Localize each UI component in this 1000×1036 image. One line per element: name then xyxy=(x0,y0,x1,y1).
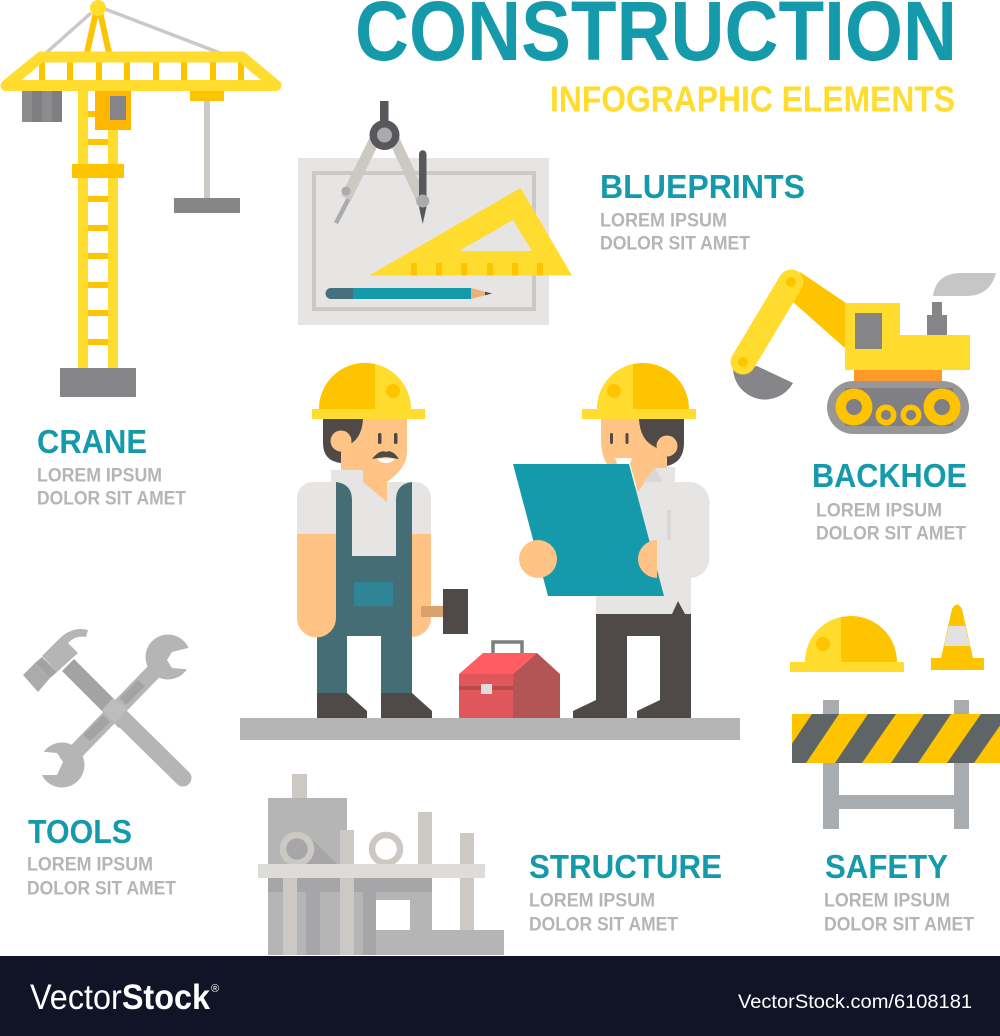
crane top frame xyxy=(87,12,109,53)
tracks xyxy=(827,381,969,434)
beam xyxy=(258,864,485,878)
safety label xyxy=(824,849,974,936)
barrier band xyxy=(779,714,1000,763)
tools label: TOOLS xyxy=(28,814,132,851)
structure shadow xyxy=(297,840,337,864)
crane hook xyxy=(174,91,240,213)
safety label: LOREM IPSUM xyxy=(824,890,950,912)
blueprints label xyxy=(600,169,805,254)
shirt body xyxy=(596,467,710,614)
backhoe label: BACKHOE xyxy=(812,458,967,495)
hammer xyxy=(23,629,183,778)
crane label: LOREM IPSUM xyxy=(37,464,162,486)
counterweight xyxy=(22,91,62,122)
exhaust xyxy=(927,302,947,335)
registered mark: ® xyxy=(211,983,219,995)
crane label: CRANE xyxy=(37,424,147,461)
crane rungs xyxy=(39,60,244,345)
structure label: DOLOR SIT AMET xyxy=(529,914,678,936)
tools label: LOREM IPSUM xyxy=(27,854,153,876)
blueprints illustration xyxy=(298,101,572,325)
footer bar xyxy=(0,956,1000,1036)
paper xyxy=(298,158,549,325)
columns xyxy=(283,812,474,955)
blueprints label: LOREM IPSUM xyxy=(600,210,727,232)
trousers xyxy=(317,610,412,693)
hook cable xyxy=(204,100,210,198)
subtitle: INFOGRAPHIC ELEMENTS xyxy=(550,78,955,120)
collar and pleat xyxy=(643,468,671,540)
face xyxy=(601,419,684,492)
shirt xyxy=(297,470,431,560)
crane illustration xyxy=(6,0,276,397)
tools icon xyxy=(23,629,196,788)
shoes xyxy=(573,700,660,718)
footer url: VectorStock.com/6108181 xyxy=(738,992,972,1013)
crane top ball xyxy=(90,0,106,16)
backhoe illustration xyxy=(733,272,996,434)
crossing xyxy=(102,698,128,723)
safety label: SAFETY xyxy=(825,849,948,886)
helmet xyxy=(582,363,696,419)
worker reading plan xyxy=(513,363,710,718)
hands on plan xyxy=(519,540,657,578)
toolbox xyxy=(459,642,560,718)
backhoe label: DOLOR SIT AMET xyxy=(816,522,966,544)
mast band xyxy=(72,164,124,178)
footer logo: VectorStock xyxy=(30,978,210,1017)
bucket xyxy=(733,366,793,400)
set square xyxy=(369,188,572,276)
safety helmet xyxy=(790,616,904,672)
crane label: DOLOR SIT AMET xyxy=(37,488,186,510)
worker with hammer xyxy=(297,363,468,718)
overalls bib xyxy=(336,482,412,636)
crane cab xyxy=(95,91,131,130)
stick xyxy=(738,277,796,367)
pencil xyxy=(326,288,492,299)
road barrier xyxy=(779,700,1000,829)
wrench xyxy=(36,634,196,788)
cab body xyxy=(845,303,970,381)
structure label: LOREM IPSUM xyxy=(529,890,655,912)
backhoe label: LOREM IPSUM xyxy=(816,500,942,522)
crane jib xyxy=(6,57,276,86)
backhoe label xyxy=(812,458,967,544)
compass xyxy=(336,101,429,224)
trousers xyxy=(596,601,691,718)
crane mast xyxy=(78,88,118,369)
arms xyxy=(297,534,431,638)
face xyxy=(323,419,407,502)
traffic cone xyxy=(931,604,984,670)
floor xyxy=(240,718,740,740)
pipes xyxy=(283,835,400,863)
helmet xyxy=(312,363,425,419)
barrier legs xyxy=(823,700,969,829)
smoke xyxy=(933,273,996,296)
tools label: DOLOR SIT AMET xyxy=(27,878,176,900)
structure label: STRUCTURE xyxy=(529,849,722,886)
plan sheet xyxy=(513,464,664,596)
crane label xyxy=(37,424,186,510)
structure label xyxy=(529,849,722,936)
blueprints label: BLUEPRINTS xyxy=(600,169,805,206)
crane base xyxy=(60,368,136,397)
crane cables xyxy=(46,9,220,53)
boots xyxy=(317,693,432,718)
safety label: DOLOR SIT AMET xyxy=(824,914,974,936)
building mass xyxy=(268,774,504,955)
boom xyxy=(793,272,846,349)
structure illustration xyxy=(258,774,504,955)
hammer xyxy=(421,589,468,634)
blueprints label: DOLOR SIT AMET xyxy=(600,232,750,254)
tools label xyxy=(27,814,176,900)
